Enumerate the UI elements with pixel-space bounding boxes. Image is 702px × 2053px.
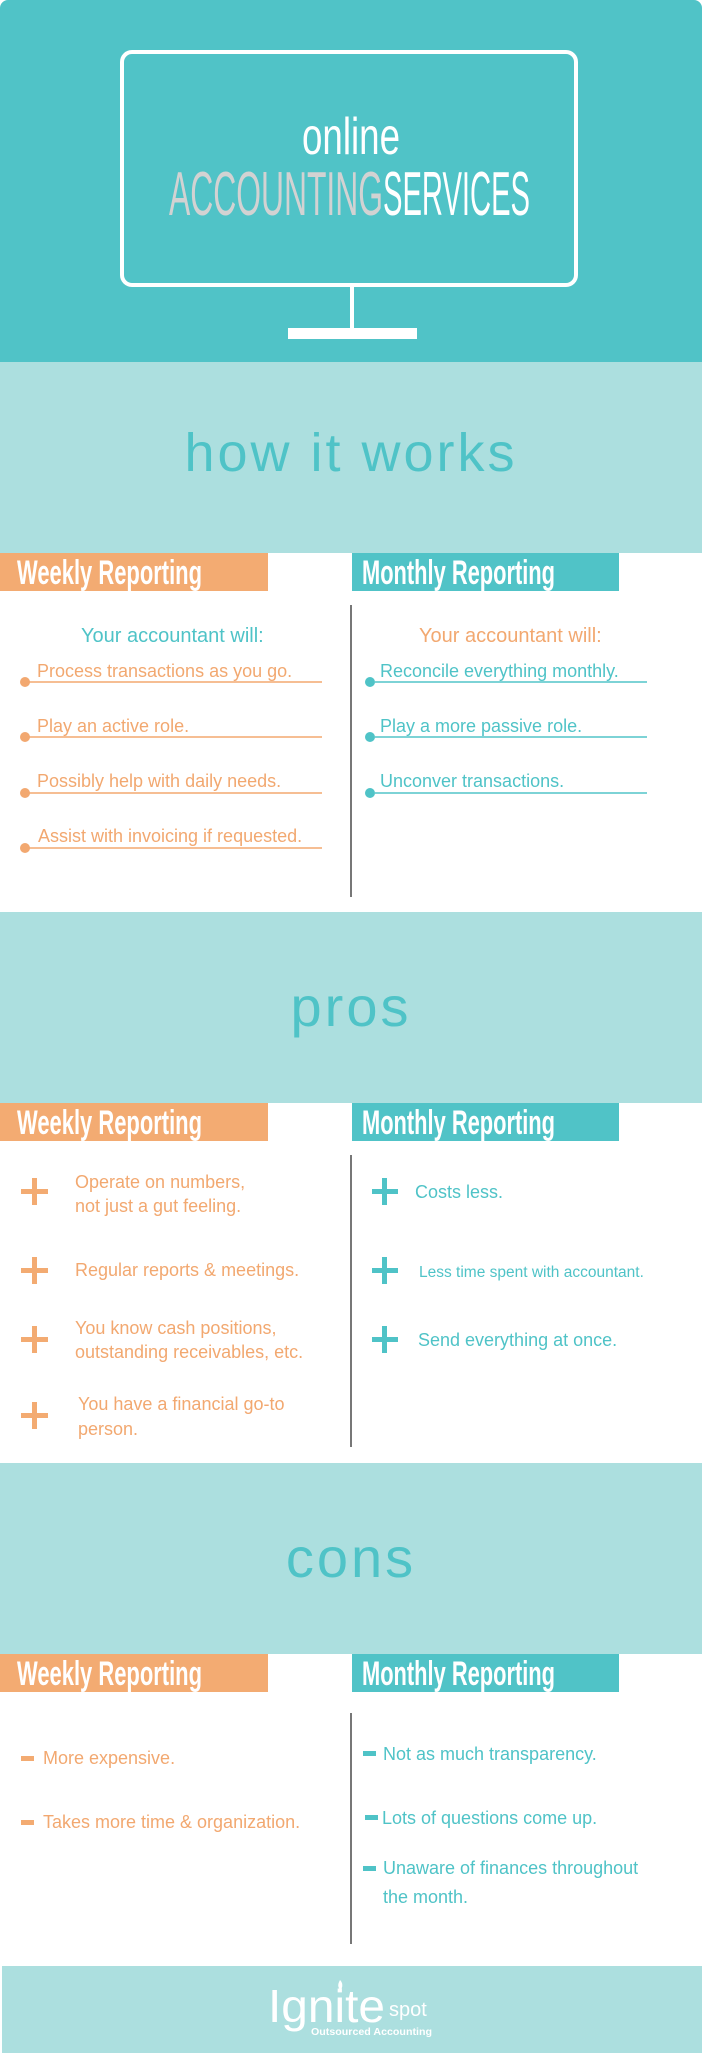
pros: weekly list: outstanding receivables, etc. [75,1342,303,1362]
how it works: weekly list: Assist with invoicing if requested. [38,826,302,846]
section banner: how it works: how it works [184,423,518,483]
cons: monthly list: Unaware of finances throughout [383,1858,638,1878]
header bar: weekly (how it works): Weekly Reporting [17,554,202,591]
cons: monthly list: Not as much transparency. [383,1744,597,1764]
how it works: weekly list: Possibly help with daily needs. [37,771,281,791]
header bars: cons: Weekly Reporting [17,1655,202,1692]
how it works: weekly list: Process transactions as you go. [37,661,292,681]
cons: weekly list: Takes more time & organization. [43,1812,300,1832]
header bars: cons: Monthly Reporting [362,1655,555,1692]
icon: monitor with title: ACCOUNTING [169,160,383,229]
icon: monitor with title [120,50,578,339]
section banner: pros [0,912,702,1103]
header bar: weekly (how it works): Monthly Reporting [362,554,555,591]
section banner: cons [0,1463,702,1654]
icon: monitor with title: online [302,108,400,166]
header bars: pros: Weekly Reporting [17,1104,202,1141]
header panel: monitor title [0,0,702,362]
cons: monthly list [363,1744,638,1907]
how it works: weekly list [20,625,322,853]
header bars: pros [0,1103,619,1141]
icon: monitor with title: SERVICES [383,160,530,229]
pros: weekly list: You know cash positions, [75,1318,276,1338]
how it works: weekly list: Play an active role. [37,716,189,736]
cons: weekly list [21,1748,300,1832]
header bars: cons [0,1654,619,1692]
how it works: monthly list: Your accountant will: [419,625,602,647]
pros: weekly list: Operate on numbers, [75,1172,245,1192]
cons: monthly list: Lots of questions come up. [382,1808,597,1828]
pros: monthly list [372,1178,644,1353]
pros: monthly list: Less time spent with accountant. [419,1264,644,1281]
section banner: how it works [0,362,702,553]
pros: weekly list: Regular reports & meetings. [75,1260,299,1280]
logo: Ignite spot [268,1980,432,2038]
logo: Ignite spot: Ignite [268,1980,385,2032]
section banner: cons: cons [286,1526,416,1589]
header bars: pros: Monthly Reporting [362,1104,555,1141]
pros: weekly list: You have a financial go-to [78,1394,284,1414]
pros: weekly list [21,1172,303,1439]
header bar: weekly (how it works) [0,553,619,591]
how it works: monthly list: Unconver transactions. [380,771,564,791]
section banner: pros: pros [291,975,411,1038]
pros: weekly list: person. [78,1419,138,1439]
footer with logo [2,1966,702,2053]
how it works: monthly list [365,625,647,798]
logo: Ignite spot: spot [389,1999,427,2021]
how it works: monthly list: Play a more passive role. [380,716,582,736]
pros: monthly list: Send everything at once. [418,1330,617,1350]
pros: monthly list: Costs less. [415,1182,503,1202]
logo: Ignite spot: Outsourced Accounting [311,2027,432,2038]
pros: weekly list: not just a gut feeling. [75,1196,241,1216]
how it works: monthly list: Reconcile everything monthly. [380,661,619,681]
cons: weekly list: More expensive. [43,1748,175,1768]
cons: monthly list: the month. [383,1887,468,1907]
how it works: weekly list: Your accountant will: [81,625,264,647]
